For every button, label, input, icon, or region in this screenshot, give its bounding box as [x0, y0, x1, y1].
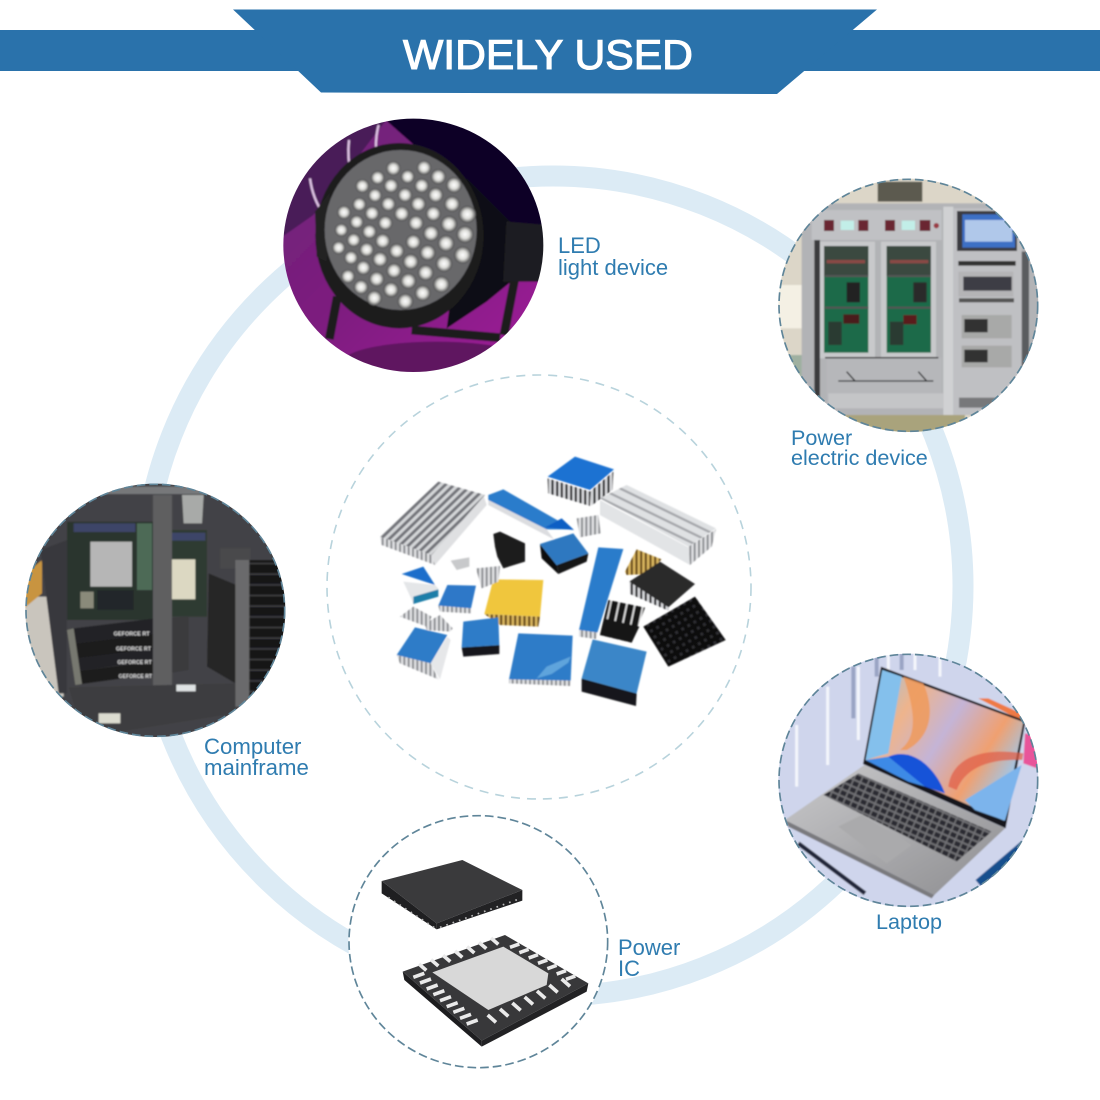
computer mainframe label: Computer [204, 734, 302, 759]
dashed border [779, 179, 1038, 431]
black block [629, 562, 695, 611]
big black pin heat sink [643, 597, 726, 667]
contact pads [413, 938, 575, 1024]
center image: heat sinks with thermal pads [380, 457, 726, 706]
power IC photo [348, 815, 608, 1068]
header banner [0, 10, 1100, 94]
wiring panel [825, 358, 943, 408]
dashed border [26, 484, 285, 736]
dashed border [349, 816, 608, 1068]
background ring [143, 176, 963, 996]
keyboard [823, 773, 992, 862]
computer mainframe photo [22, 480, 289, 747]
backdrop with stairs [775, 650, 1042, 917]
clear silver heat sink, right [600, 485, 716, 565]
backdrop [283, 121, 538, 356]
center dashed circle [327, 375, 751, 799]
power IC label: Power [618, 935, 680, 960]
graphics cards [67, 617, 189, 685]
cabinet frame [802, 203, 1042, 415]
lamp housing [447, 178, 515, 328]
computer mainframe label: mainframe [204, 755, 309, 780]
small black pin heat sink [493, 532, 525, 568]
banner side bar [0, 30, 1100, 71]
blue block with silver fins [397, 627, 451, 679]
tiny silver sink [451, 557, 469, 570]
graphics cards: GEFORCE RT [117, 660, 152, 666]
silver heat sink, large left [380, 482, 487, 565]
small silver fins [577, 515, 601, 537]
blue center pad [509, 633, 573, 686]
banner trapezoid [233, 10, 877, 94]
dashed border [779, 654, 1038, 906]
screen [863, 667, 1026, 828]
indicator panel [812, 210, 942, 240]
bottom shelf [98, 683, 234, 724]
blue top heat sink [548, 457, 614, 506]
phone behind [978, 698, 1042, 770]
case interior [32, 484, 274, 737]
yellow pad [484, 579, 543, 627]
laptop photo [775, 650, 1042, 917]
motherboard right [170, 530, 207, 617]
blue long strip [579, 547, 623, 639]
lamp face [325, 150, 477, 310]
blue pad on black block [582, 639, 647, 706]
silver flat sinks [400, 607, 453, 632]
power IC label: IC [618, 956, 640, 981]
center cable bundle [182, 495, 204, 523]
lower chip [403, 935, 588, 1047]
laptop base [785, 765, 1005, 895]
graphics cards: GEFORCE RT [114, 631, 150, 637]
right circuit door [881, 242, 936, 358]
graphics cards: GEFORCE RT [119, 674, 152, 680]
left circuit door [820, 242, 875, 358]
upper chip [382, 860, 522, 929]
wall and floor [780, 178, 986, 418]
small blue pad [438, 585, 476, 613]
LED light device photo [280, 115, 547, 382]
LED label: LED [558, 233, 601, 258]
LED beads [332, 160, 476, 309]
graphics cards: GEFORCE RT [116, 646, 152, 652]
center blue block [540, 533, 588, 574]
laptop label: Laptop [876, 909, 942, 934]
power electric device photo [775, 175, 1042, 442]
pens [798, 843, 1023, 893]
gold pins [625, 549, 662, 575]
center pillar [153, 495, 172, 693]
title: WIDELY USED [403, 31, 693, 78]
LED label: light device [558, 255, 668, 280]
mini silver sink [476, 566, 500, 588]
peeled teal block [402, 567, 438, 604]
blue strip heat sink [488, 489, 574, 539]
right instrument rack [953, 208, 1022, 415]
cooler and door [207, 548, 289, 707]
trackpad [840, 816, 863, 828]
small black fins [600, 600, 645, 643]
stand legs [324, 280, 520, 342]
motherboard left [67, 522, 154, 620]
power electric device label: Power [791, 425, 852, 450]
blue square pad on black [462, 617, 499, 657]
power electric device label: electric device [791, 445, 928, 470]
